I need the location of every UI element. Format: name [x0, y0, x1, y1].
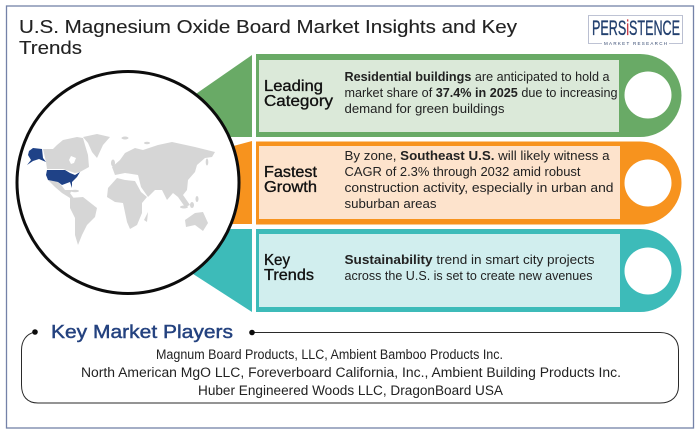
map: gray continents	[43, 134, 215, 245]
text: key trends	[344, 253, 594, 283]
left dot	[32, 329, 38, 335]
text: fastest growth: construction activity, especially in urban and	[344, 181, 614, 195]
heading: fastest growth	[264, 164, 318, 196]
heading: key trends: Trends	[264, 267, 314, 284]
text: leading category: demand for green buildings	[344, 102, 504, 116]
orange wedge	[200, 141, 252, 224]
heading: leading category: Category	[264, 93, 333, 110]
right dot	[249, 330, 255, 335]
text: leading category	[344, 70, 618, 116]
green text background	[259, 60, 619, 132]
logo	[588, 16, 682, 46]
text: key trends: Sustainability trend in smart city projects	[344, 253, 594, 267]
heading: leading category: Leading	[264, 78, 323, 95]
heading: key market players: Key Market Players	[51, 321, 233, 342]
heading: fastest growth: Fastest	[264, 164, 318, 181]
teal text background	[259, 234, 620, 307]
panel: key market players	[22, 321, 678, 403]
heading: key trends: Key	[264, 252, 290, 269]
heading: fastest growth: Growth	[264, 179, 317, 196]
title: Trends	[19, 38, 82, 58]
title	[19, 17, 517, 58]
orange pill hole	[624, 160, 672, 206]
text: leading category: Residential buildings are anticipated to hold a	[344, 70, 610, 84]
orange pill	[256, 142, 682, 224]
green wedge	[190, 55, 252, 137]
logo: MARKET RESEARCH	[604, 41, 667, 46]
world map	[27, 134, 215, 245]
heading: key trends	[264, 252, 314, 284]
players list: Magnum Board Products, LLC, Ambient Bamboo Products Inc.	[156, 347, 503, 362]
players list	[81, 347, 621, 398]
players outline	[22, 332, 678, 403]
teal pill hole	[624, 248, 672, 294]
players list: Huber Engineered Woods LLC, DragonBoard USA	[198, 383, 503, 398]
text: fastest growth	[344, 149, 614, 211]
title: U.S. Magnesium Oxide Board Market Insights and Key	[19, 17, 517, 37]
map: highlighted United States	[27, 148, 80, 188]
text: fastest growth: By zone, Southeast U.S. will likely witness a	[344, 149, 610, 163]
heading: leading category	[264, 78, 333, 110]
panel: fastest growth	[200, 141, 682, 224]
text: fastest growth: CAGR of 2.3% through 2032 amid robust	[344, 165, 581, 179]
text: fastest growth: suburban areas	[344, 197, 436, 211]
orange text background	[259, 146, 620, 219]
teal wedge	[190, 229, 252, 312]
text: leading category: market share of 37.4% in 2025 due to increasing	[344, 86, 618, 100]
teal pill	[256, 229, 682, 312]
text: key trends: across the U.S. is set to create new avenues	[344, 269, 592, 283]
globe circle	[17, 72, 239, 294]
players list: North American MgO LLC, Foreverboard California, Inc., Ambient Building Products Inc.	[81, 365, 621, 380]
green pill	[256, 54, 681, 137]
panel: leading category	[190, 54, 681, 137]
panel: key trends	[190, 229, 682, 312]
green pill hole	[624, 72, 672, 118]
